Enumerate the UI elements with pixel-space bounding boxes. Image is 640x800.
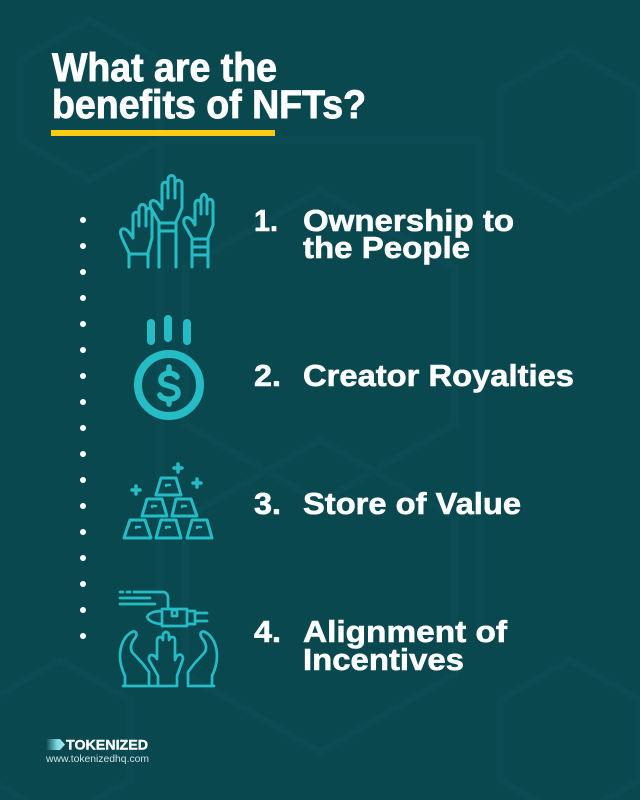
item 1 label: the People [303,231,470,265]
item 4 label [254,615,508,677]
item 3 label: Store of Value [303,487,521,521]
website url: www.tokenizedhq.com [45,753,149,765]
item 4 label: Alignment of [303,615,508,649]
item 4 label: 4. [254,615,281,649]
title underline [51,130,275,136]
icon: hands and plug [120,592,217,686]
logo mark [46,739,65,750]
item 2 label: Creator Royalties [303,359,574,393]
dotted timeline [80,217,86,639]
item 2 label: 2. [254,359,281,393]
item 1 label [254,204,514,265]
logo [46,736,148,752]
title [52,46,366,127]
icon: stacked gold bars [124,464,212,538]
item 3 label: 3. [254,487,281,521]
item 4 label: Incentives [303,643,464,677]
title: benefits of NFTs? [52,83,366,127]
title: What are the [52,46,277,90]
icon: coin with dollar [138,319,200,416]
icon: raised hands [121,176,213,267]
item 1 label: 1. [254,204,278,238]
logo wordmark: TOKENIZED [66,736,148,752]
item 1 label: Ownership to [303,204,514,238]
